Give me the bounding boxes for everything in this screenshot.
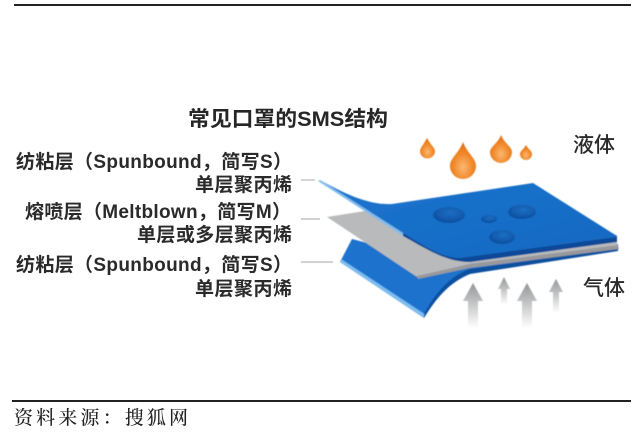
label: top material: 单层聚丙烯	[195, 174, 292, 196]
label: spunbound bottom: 纺粘层（Spunbound，简写S）	[16, 254, 292, 276]
icons: orange liquid drops	[420, 135, 532, 179]
label: liquid: 液体	[573, 134, 615, 157]
label: gas: 气体	[583, 277, 625, 300]
source note: 资料来源：搜狐网	[14, 407, 188, 429]
bottom rule	[12, 400, 631, 402]
label: middle material: 单层或多层聚丙烯	[137, 223, 292, 246]
bead 1	[433, 207, 465, 223]
bottom spunbound layer	[340, 239, 618, 318]
top rule	[14, 4, 631, 6]
arrow 3	[517, 283, 537, 328]
water beads	[433, 205, 536, 244]
drop 1	[420, 138, 435, 159]
drop 2	[450, 142, 476, 179]
labels: layer descriptions	[16, 151, 292, 300]
arrow 1	[463, 283, 483, 328]
bead 2	[481, 215, 497, 223]
arrow 4	[549, 279, 563, 313]
label: meltblown: 熔喷层（Meltblown，简写M）	[25, 200, 291, 223]
diagram: SMS layered sheet	[318, 180, 619, 318]
bead 3	[508, 205, 536, 219]
icons: gas arrows	[463, 277, 563, 328]
label: spunbound top: 纺粘层（Spunbound，简写S）	[16, 151, 292, 173]
connector lines	[301, 180, 333, 262]
title: 常见口罩的SMS结构	[188, 108, 388, 131]
arrow 2	[498, 277, 510, 305]
top spunbound layer	[318, 180, 617, 262]
drop 3	[490, 135, 512, 163]
drop 4	[520, 145, 532, 160]
meltblown gray layer	[327, 211, 619, 279]
label: bottom material: 单层聚丙烯	[195, 278, 292, 300]
bead 4	[489, 230, 515, 244]
